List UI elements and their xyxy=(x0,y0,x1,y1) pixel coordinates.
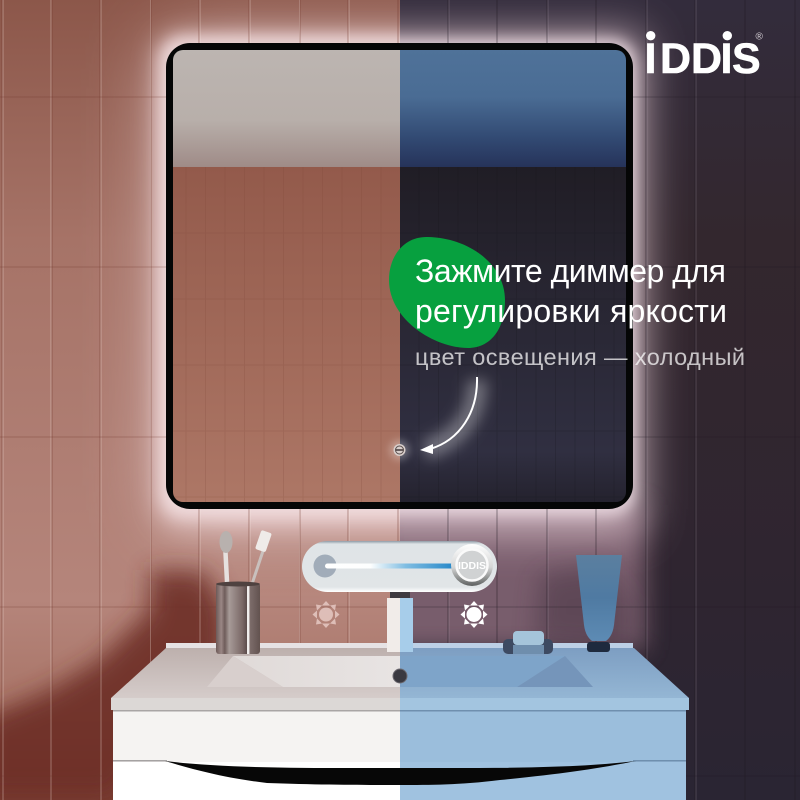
heading: Зажмите диммер для xyxy=(415,253,726,289)
wall: cold right half xyxy=(400,0,800,658)
heading: регулировки яркости xyxy=(415,293,727,329)
slider knob with logo: IDDIS xyxy=(458,560,486,572)
toothbrushes xyxy=(220,530,272,584)
mirror xyxy=(166,43,633,509)
icon: dim sun xyxy=(312,601,340,628)
basin: cold side xyxy=(400,656,565,687)
logo: IDDIS: ® xyxy=(756,32,764,42)
dimmer slider panel xyxy=(302,541,497,592)
icon: dimmer touch button xyxy=(390,440,410,460)
wall: warm left half xyxy=(0,0,400,800)
arrow to dimmer xyxy=(420,377,477,454)
toothbrush cup xyxy=(216,582,260,654)
heading xyxy=(415,253,727,329)
green blob accent xyxy=(389,237,505,348)
subheading: light colour: цвет освещения — холодный xyxy=(415,344,745,370)
basin: warm side xyxy=(233,656,400,687)
sink countertop xyxy=(111,648,689,710)
cosmetic tube xyxy=(576,555,622,652)
drawer handle gap xyxy=(165,761,636,785)
slider knob with logo xyxy=(451,544,493,586)
mirror reflection xyxy=(173,50,626,502)
soap dish with soap xyxy=(503,631,553,654)
icon: bright sun xyxy=(460,601,488,628)
drain xyxy=(393,669,407,683)
slider track xyxy=(325,564,455,568)
front lip xyxy=(111,698,400,710)
logo: IDDIS: IDDIS xyxy=(644,35,761,83)
mirror frame xyxy=(166,43,633,509)
faucet xyxy=(387,590,413,652)
slider start dot xyxy=(314,554,336,578)
cabinet xyxy=(113,710,686,800)
backsplash edge xyxy=(166,643,633,649)
